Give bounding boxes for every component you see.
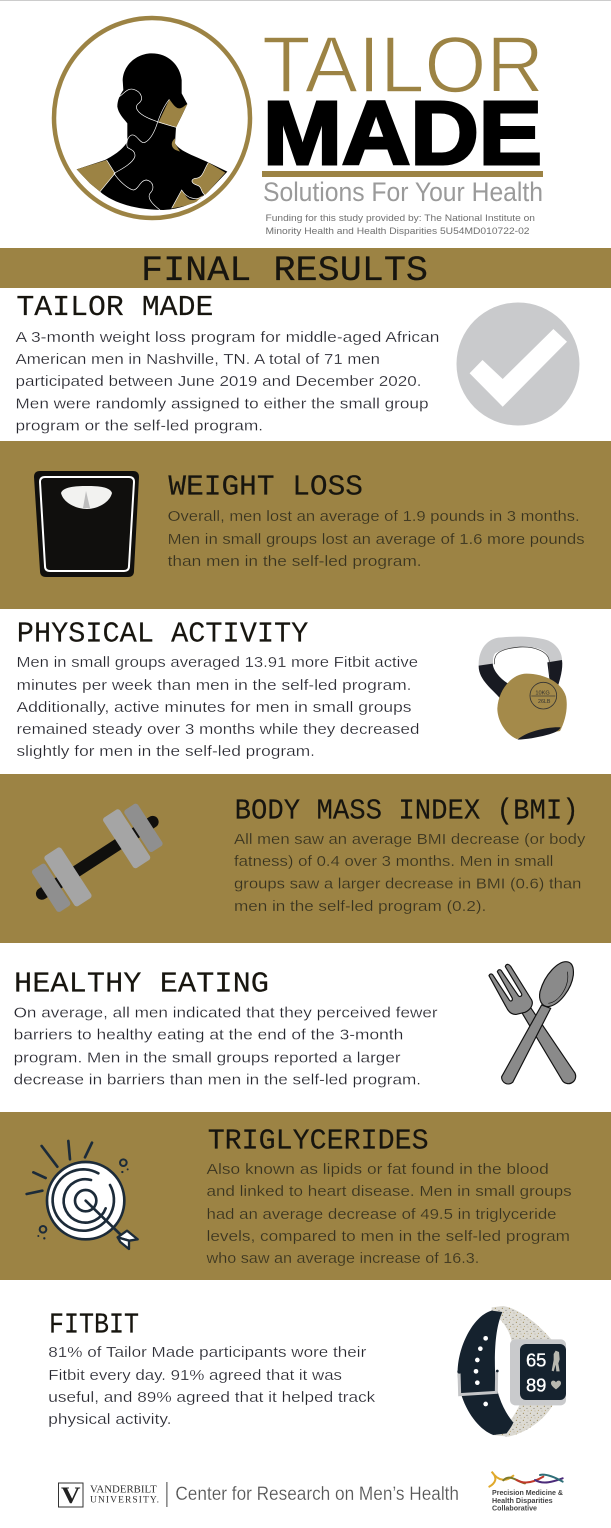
Vanderbilt logo: UNIVERSITY. — [90, 1496, 159, 1506]
heading: TRIGLYCERIDES — [208, 1124, 429, 1157]
text block — [205, 1161, 572, 1267]
text block: groups saw a larger decrease in BMI (0.6) than — [234, 875, 581, 892]
heading: BODY MASS INDEX (BMI) — [235, 794, 579, 827]
header logo: Tailor Made — [54, 18, 544, 218]
text block: On average, all men indicated that they perceived fewer — [14, 1004, 438, 1021]
funding note: Minority Health and Health Disparities 5U54MD010722-02 — [266, 226, 530, 237]
text block: levels, compared to men in the self-led program — [206, 1228, 570, 1245]
text block: fatness) of 0.4 over 3 months. Men in small — [234, 853, 553, 870]
heading: FITBIT — [49, 1308, 139, 1341]
text block — [16, 329, 440, 434]
text block: minutes per week than men in the self-led program. — [16, 677, 411, 694]
logo tagline: Solutions For Your Health — [263, 177, 543, 207]
icon: fitness watch: 89 — [526, 1374, 546, 1395]
Vanderbilt logo — [58, 1482, 167, 1508]
text block — [14, 1004, 438, 1088]
heading: HEALTHY EATING — [14, 968, 269, 1001]
text block: participated between June 2019 and December 2020. — [16, 373, 422, 390]
text block: Additionally, active minutes for men in small groups — [16, 699, 412, 716]
text block: than men in the self-led program. — [168, 553, 422, 570]
icon: target with arrow — [27, 1141, 138, 1249]
logo rule — [262, 171, 543, 177]
text block: 81% of Tailor Made participants wore their — [48, 1344, 366, 1361]
Vanderbilt logo: V — [61, 1483, 81, 1508]
text block: American men in Nashville, TN. A total of 71 men — [16, 351, 380, 368]
text block: program. Men in the small groups reported a larger — [14, 1049, 401, 1066]
text block — [16, 654, 420, 760]
heading: PHYSICAL ACTIVITY — [17, 618, 308, 651]
collaborative logo: Collaborative — [492, 1504, 537, 1513]
panel: tailor made — [0, 288, 611, 441]
title: FINAL RESULTS — [141, 251, 428, 291]
footer logos — [58, 1472, 564, 1513]
icon: kettlebell: 26LB — [538, 699, 551, 705]
icon: kettlebell — [479, 637, 567, 740]
heading: TAILOR MADE — [16, 291, 213, 324]
text block: useful, and 89% agreed that it helped track — [48, 1389, 376, 1406]
logo icon: puzzle silhouette in circle — [54, 18, 250, 218]
text block: men in the self-led program (0.2). — [234, 898, 486, 915]
panel: triglycerides — [0, 1112, 611, 1280]
title band: final results — [0, 248, 611, 291]
panel: fitbit — [0, 1280, 611, 1450]
panel: physical activity — [0, 609, 611, 774]
text block — [168, 508, 585, 570]
text block: A 3-month weight loss program for middle-aged African — [16, 329, 440, 346]
text block: barriers to healthy eating at the end of the 3-month — [14, 1026, 403, 1043]
icon: dumbbell — [21, 793, 174, 922]
collaborative logo: Health Disparities — [492, 1496, 553, 1505]
collaborative logo: Precision Medicine & — [492, 1488, 564, 1497]
text block: had an average decrease of 49.5 in triglyceride — [206, 1206, 556, 1223]
text block: slightly for men in the self-led program. — [16, 743, 315, 760]
text block: Men in small groups lost an average of 1.6 more pounds — [168, 531, 585, 548]
icon: fitness watch: 65 — [526, 1350, 546, 1371]
text block: program or the self-led program. — [16, 418, 263, 434]
icon: check mark — [456, 302, 580, 426]
icon: kettlebell: 10KG — [535, 691, 550, 697]
panel: weight loss — [0, 441, 611, 609]
text block: Overall, men lost an average of 1.9 pounds in 3 months. — [168, 508, 580, 525]
icon: bathroom scale — [34, 471, 139, 577]
text block: physical activity. — [48, 1411, 171, 1428]
heading: WEIGHT LOSS — [168, 470, 363, 504]
text block: who saw an average increase of 16.3. — [205, 1250, 479, 1267]
logo word: TAILOR: TAILOR — [262, 20, 544, 109]
icon: fork and spoon — [489, 962, 576, 1084]
text block — [234, 831, 586, 915]
funding note — [266, 213, 535, 237]
center name: Center for Research on Men’s Health — [175, 1484, 459, 1505]
collaborative logo — [489, 1472, 564, 1513]
text block: Men in small groups averaged 13.91 more Fitbit active — [16, 654, 418, 671]
Vanderbilt logo: VANDERBILT — [90, 1485, 157, 1496]
text block — [48, 1344, 376, 1428]
text block: remained steady over 3 months while they decreased — [16, 721, 420, 738]
text block: Fitbit every day. 91% agreed that it was — [48, 1367, 342, 1384]
panel: healthy eating — [0, 943, 611, 1112]
text block: decrease in barriers than men in the self-led program. — [14, 1071, 421, 1088]
text block: Also known as lipids or fat found in the blood — [206, 1161, 549, 1178]
panel: body mass index — [0, 774, 611, 943]
text block: and linked to heart disease. Men in small groups — [206, 1183, 572, 1200]
icon: fitness watch — [457, 1306, 566, 1437]
logo word: MADE: MADE — [263, 84, 542, 184]
funding note: Funding for this study provided by: The National Institute on — [266, 213, 535, 224]
text block: All men saw an average BMI decrease (or body — [234, 831, 586, 848]
text block: Men were randomly assigned to either the small group — [16, 396, 428, 412]
